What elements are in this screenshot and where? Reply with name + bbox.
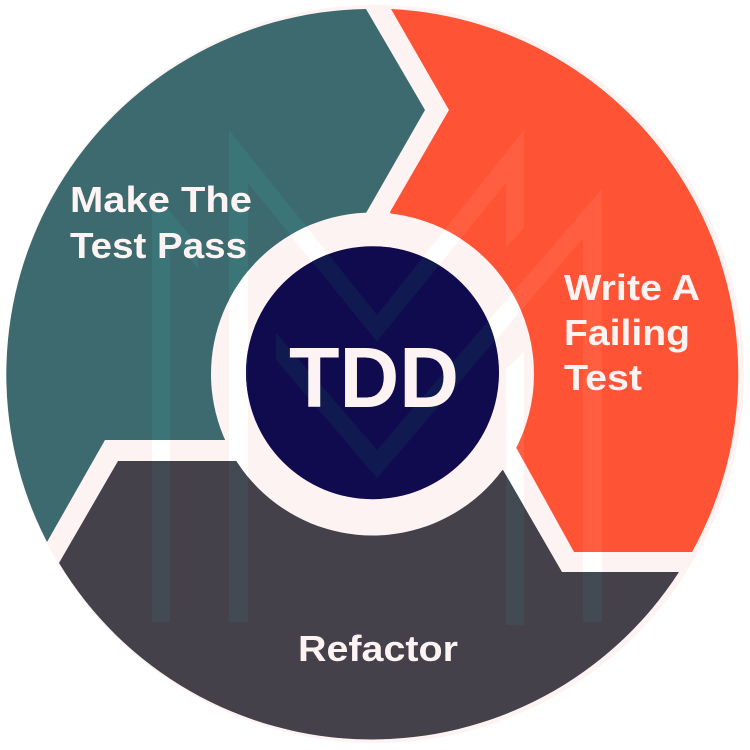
label: write a failing test (564, 267, 700, 398)
center ring (211, 212, 534, 536)
center label: TDD: TDD (289, 331, 459, 426)
label: refactor: Refactor (298, 628, 458, 669)
label: make the test pass: Make The (70, 179, 252, 220)
segment: write a failing test (390, 9, 738, 552)
label: make the test pass (70, 179, 252, 266)
label: write a failing test: Test (564, 357, 642, 398)
label: make the test pass: Test Pass (70, 225, 247, 266)
segment: refactor (59, 461, 679, 740)
label: write a failing test: Failing (564, 312, 690, 353)
label: write a failing test: Write A (564, 267, 700, 308)
center navy circle (246, 246, 499, 500)
segment: make the test pass (6, 9, 425, 542)
